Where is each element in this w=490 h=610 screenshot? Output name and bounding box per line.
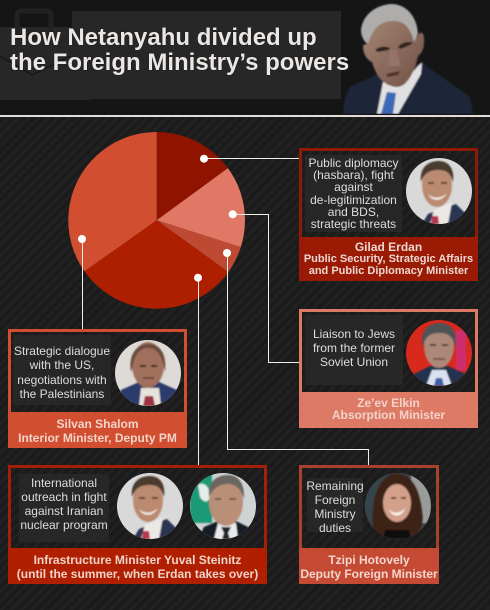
slice: Steinitz (84, 220, 228, 309)
header background shape (0, 8, 341, 100)
text: Shalom duties (13, 335, 111, 405)
label: Ze'ev Elkin: Absorption Minister (332, 408, 445, 422)
slice: Shalom (68, 132, 157, 271)
connector: Erdan (200, 155, 300, 163)
text: Erdan duties: and BDS, (328, 205, 379, 219)
text: Elkin duties: from the former (313, 341, 395, 355)
panel: Ze'ev Elkin (299, 309, 478, 428)
label: Tzipi Hotovely: Tzipi Hotovely (328, 553, 410, 567)
panel: Gilad Erdan (299, 148, 478, 281)
connector: Elkin (229, 210, 300, 362)
slice: Erdan (157, 132, 228, 220)
text: Erdan duties: against (334, 180, 373, 194)
slice: Elkin (157, 168, 245, 247)
text: Shalom duties: with the US, (30, 358, 94, 372)
slice: Hotovely (157, 220, 241, 272)
text: Erdan duties (305, 155, 402, 232)
label: Gilad Erdan: Gilad Erdan (355, 240, 422, 254)
text: Erdan duties: de-legitimization (310, 192, 397, 206)
title: the Foreign Ministry’s powers (10, 49, 349, 76)
photo: Gilad Erdan (117, 473, 183, 539)
connector: Steinitz (194, 274, 202, 465)
text: Erdan duties: Public diplomacy (308, 156, 399, 170)
text: Hotovely duties: Ministry (314, 507, 356, 521)
text: Erdan duties: strategic threats (311, 217, 396, 231)
photo: Gilad Erdan (406, 158, 472, 224)
label: Gilad Erdan: and Public Diplomacy Minister (309, 265, 468, 277)
portrait: Netanyahu (342, 3, 474, 114)
label: Gilad Erdan: Public Security, Strategic Affairs (304, 253, 473, 265)
label: Ze'ev Elkin (299, 392, 478, 428)
photo: Silvan Shalom (115, 340, 181, 406)
panel: Tzipi Hotovely (299, 465, 439, 584)
text: Shalom duties: negotiations with (17, 372, 107, 386)
text: Hotovely duties (307, 478, 363, 532)
label: Yuval Steinitz (8, 548, 267, 584)
label: Tzipi Hotovely: Deputy Foreign Minister (300, 567, 438, 581)
label: Tzipi Hotovely (299, 548, 439, 584)
photo: Ze'ev Elkin (406, 320, 472, 386)
label: Silvan Shalom: Silvan Shalom (56, 417, 139, 431)
text: Shalom duties: Strategic dialogue (14, 344, 110, 358)
text: Elkin duties: Soviet Union (320, 355, 388, 369)
text: Elkin duties: Liaison to Jews (313, 327, 395, 341)
header band (0, 0, 490, 117)
text: Steinitz duties (19, 474, 109, 542)
pie chart (68, 132, 245, 309)
photo: Yuval Steinitz (190, 473, 256, 539)
label: Silvan Shalom: Interior Minister, Deputy PM (18, 431, 177, 445)
text: Elkin duties (305, 315, 403, 385)
text: Erdan duties: (hasbara), fight (313, 168, 394, 182)
title: How Netanyahu divided up (10, 24, 317, 51)
text: Steinitz duties: International (31, 476, 97, 490)
connector: Hotovely (223, 249, 368, 465)
label: Yuval Steinitz: (until the summer, when Erdan takes over) (17, 567, 258, 581)
label: Ze'ev Elkin: Ze’ev Elkin (357, 396, 420, 410)
label: Silvan Shalom (8, 412, 187, 448)
label: Gilad Erdan (299, 237, 478, 281)
text: Steinitz duties: outreach in fight (21, 490, 107, 504)
photo: Tzipi Hotovely (365, 473, 431, 539)
text: Steinitz duties: nuclear program (20, 518, 108, 532)
connector: Shalom (78, 235, 86, 329)
text: Steinitz duties: against Iranian (25, 504, 103, 518)
text: Hotovely duties: duties (319, 521, 351, 535)
label: Yuval Steinitz: Infrastructure Minister Yuval Steinitz (34, 553, 241, 567)
text: Shalom duties: the Palestinians (20, 387, 104, 401)
title (10, 24, 349, 76)
text: Hotovely duties: Foreign (315, 493, 355, 507)
panel: Silvan Shalom (8, 329, 187, 448)
text: Hotovely duties: Remaining (306, 479, 364, 493)
panel: Yuval Steinitz (8, 465, 267, 584)
